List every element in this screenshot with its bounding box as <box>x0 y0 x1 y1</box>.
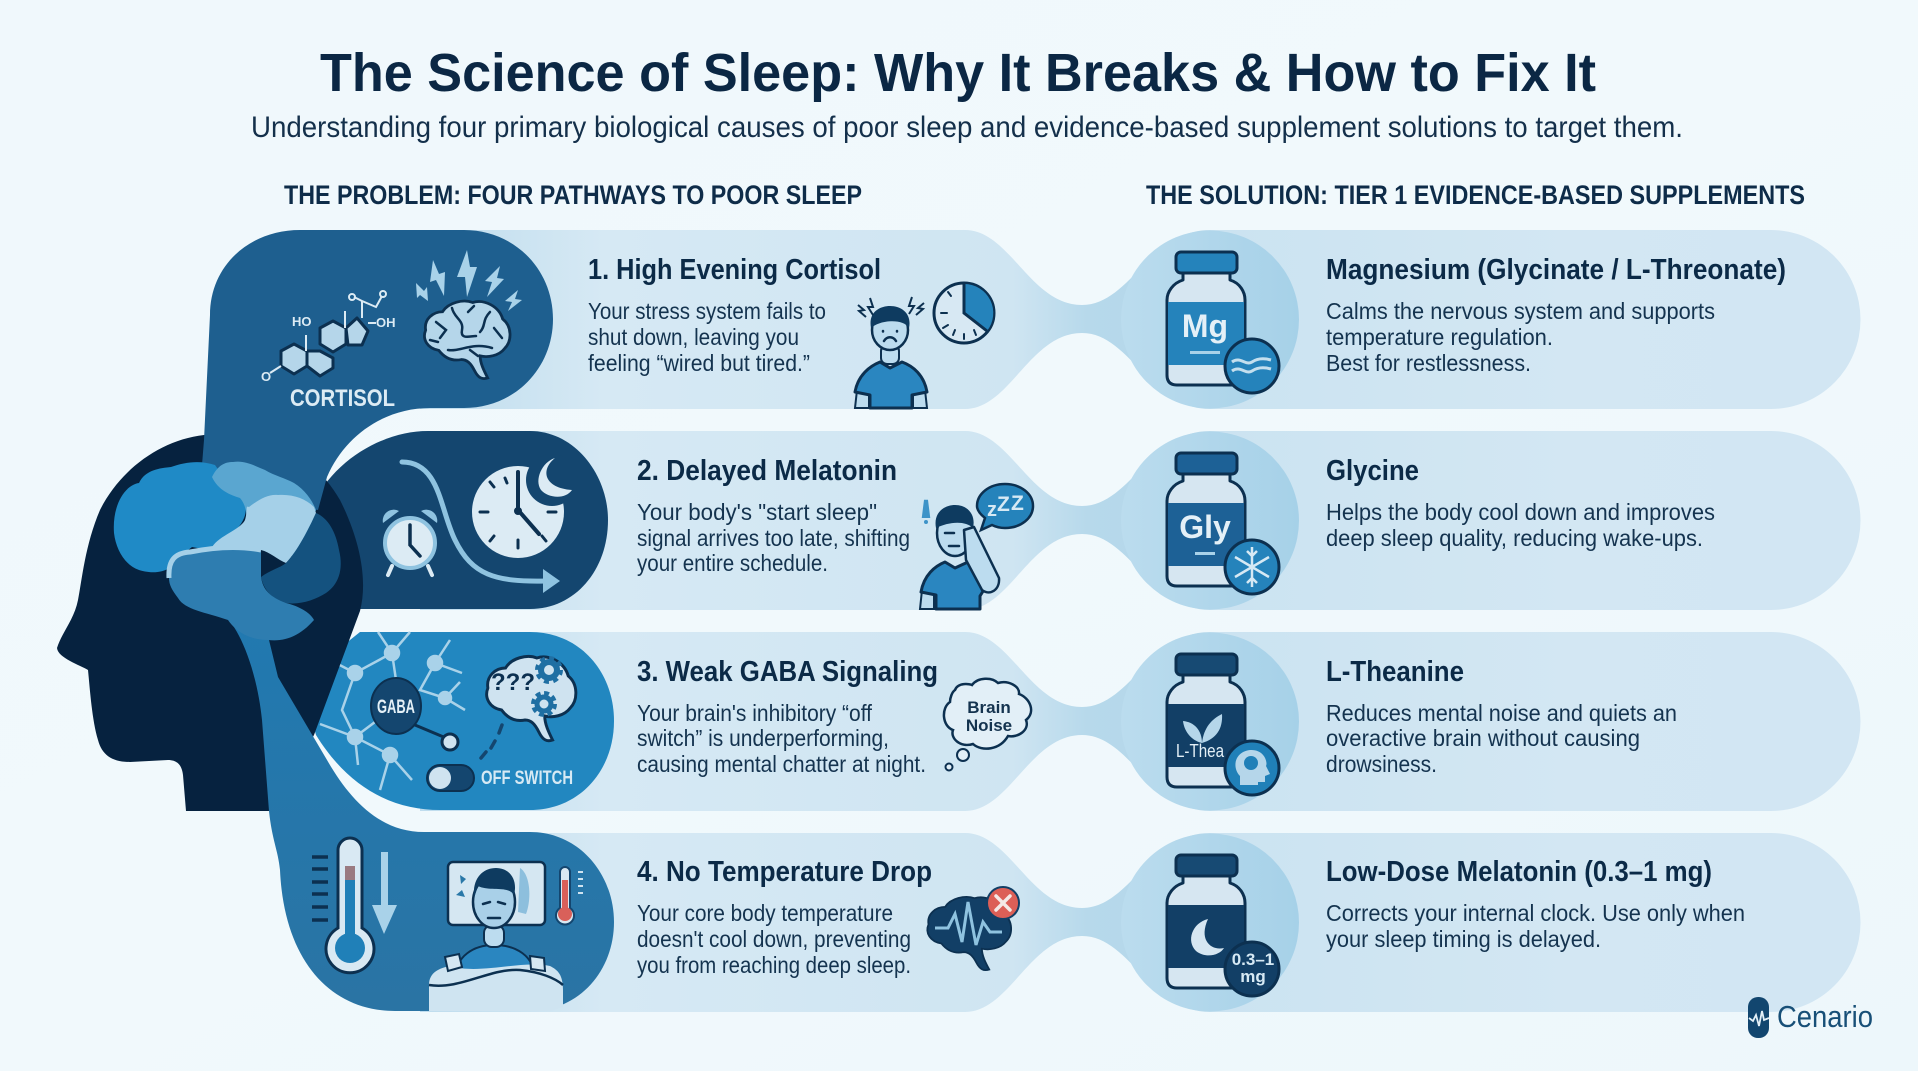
panel: magnesium text: Best for restlessness. <box>1326 350 1531 376</box>
panel: low-dose melatonin text: Corrects your internal clock. Use only when <box>1326 900 1745 926</box>
panel: row 4 text: doesn't cool down, preventing <box>637 926 911 952</box>
icon: sleepy person rubbing eye <box>920 484 1033 609</box>
panel: l-theanine text: Reduces mental noise and quiets an <box>1326 700 1677 726</box>
icon: l-theanine bottle <box>1167 654 1279 795</box>
panel: row 1 text: shut down, leaving you <box>588 324 799 350</box>
light row backgrounds with connecting necks <box>420 230 1860 1012</box>
icon: GABA node <box>371 678 458 750</box>
icon: brain noise thought cloud: Noise <box>966 716 1012 735</box>
panel: row 3 text: causing mental chatter at night. <box>637 751 926 777</box>
panel: row 1 text: Your stress system fails to <box>588 298 826 324</box>
panel: magnesium text <box>1326 254 1786 376</box>
panel: low-dose melatonin text: Low-Dose Melatonin (0.3–1 mg) <box>1326 856 1712 888</box>
panel: row 4 text: Your core body temperature <box>637 900 893 926</box>
icon: sleeping person in bed <box>429 862 563 1011</box>
panel: row 3 text: Your brain's inhibitory “off <box>637 700 872 726</box>
panel: row 2 text <box>637 455 910 576</box>
panel: magnesium text: Calms the nervous system and supports <box>1326 298 1715 324</box>
panel: row 2 text: 2. Delayed Melatonin <box>637 455 897 487</box>
heading: the solution: THE SOLUTION: TIER 1 EVIDENCE-BASED SUPPLEMENTS <box>1146 180 1805 210</box>
panel: row 1 text: feeling “wired but tired.” <box>588 350 810 376</box>
icon: sleep delay curve arrow <box>402 462 560 593</box>
icon: brain noise thought cloud <box>944 679 1031 770</box>
logo: Cenario: Cenario <box>1777 999 1873 1034</box>
icon: sleepy person rubbing eye: z <box>987 499 997 521</box>
panel: glycine text: Glycine <box>1326 455 1419 487</box>
icon: low-dose melatonin bottle: mg <box>1240 967 1266 986</box>
logo: Cenario <box>1748 997 1873 1038</box>
panel: row 2 text: your entire schedule. <box>637 550 828 576</box>
panel: row 3 text <box>637 656 938 777</box>
icon: off switch toggle <box>427 725 573 791</box>
icon: brain with question marks and gears <box>487 656 576 741</box>
icon: thermometer with down arrow <box>312 838 397 973</box>
panel: no temperature drop icons <box>229 620 614 1011</box>
panel: magnesium text: Magnesium (Glycinate / L-Threonate) <box>1326 254 1786 286</box>
panel: l-theanine text <box>1326 656 1677 777</box>
icon: glycine bottle: Gly <box>1179 509 1231 545</box>
panel: low-dose melatonin text: your sleep timing is delayed. <box>1326 926 1601 952</box>
icon: cortisol molecule <box>261 291 396 412</box>
brain blobs <box>114 462 341 640</box>
subtitle: Understanding four primary biological causes of poor sleep and evidence-based supplement solutions to target them. <box>251 111 1683 144</box>
icon: cortisol molecule: HO <box>292 314 312 329</box>
icon: magnesium bottle: Mg <box>1182 308 1228 344</box>
icon: stressed brain with lightning <box>416 250 522 379</box>
panel: row 3 text: switch” is underperforming, <box>637 725 889 751</box>
icon: brain with question marks and gears: ??? <box>491 669 535 696</box>
icon: glycine bottle <box>1167 453 1279 594</box>
head silhouette <box>57 435 363 811</box>
icon: brain noise thought cloud: Brain <box>967 698 1011 717</box>
panel: row 4 text: 4. No Temperature Drop <box>637 856 932 888</box>
icon: sleepy person rubbing eye: Z <box>997 493 1010 516</box>
icon: low-dose melatonin bottle <box>1167 855 1279 996</box>
panel: glycine text: Helps the body cool down and improves <box>1326 499 1715 525</box>
icon: l-theanine bottle: L-Thea <box>1176 741 1225 761</box>
icon: brain with failed signal <box>927 887 1019 970</box>
icon: GABA node: GABA <box>377 697 415 718</box>
panel: row 2 text: signal arrives too late, shifting <box>637 525 910 551</box>
panel: l-theanine text: drowsiness. <box>1326 751 1437 777</box>
icon: wall clock with moon <box>472 454 578 558</box>
panel: l-theanine text: overactive brain without causing <box>1326 725 1640 751</box>
icon: magnesium bottle <box>1167 252 1279 393</box>
icon: neuron network <box>320 632 465 790</box>
icon: alarm clock <box>383 510 437 575</box>
panel: l-theanine text: L-Theanine <box>1326 656 1464 688</box>
panel: high evening cortisol icons <box>200 230 553 510</box>
icon: cortisol molecule: OH <box>376 315 396 330</box>
icon: sleepy person rubbing eye: Z <box>1011 492 1024 515</box>
icon: clock with blue wedge <box>934 283 994 343</box>
icon: cortisol molecule: O <box>261 369 271 384</box>
panel: row 4 text <box>637 856 932 978</box>
heading: the problem: THE PROBLEM: FOUR PATHWAYS TO POOR SLEEP <box>284 180 862 210</box>
panel: row 3 text: 3. Weak GABA Signaling <box>637 656 938 688</box>
panel: magnesium text: temperature regulation. <box>1326 324 1553 350</box>
panel: low-dose melatonin text <box>1326 856 1745 952</box>
panel: delayed melatonin icons <box>300 431 608 609</box>
icon: hot thermometer <box>556 867 583 924</box>
title: The Science of Sleep: Why It Breaks & How to Fix It <box>320 43 1596 103</box>
icon: cortisol molecule: CORTISOL <box>290 385 395 412</box>
panel: row 4 text: you from reaching deep sleep. <box>637 952 911 978</box>
panel: row 2 text: Your body's "start sleep" <box>637 499 877 525</box>
panel: glycine text: deep sleep quality, reducing wake-ups. <box>1326 525 1703 551</box>
panel: row 1 text: 1. High Evening Cortisol <box>588 254 881 286</box>
panel: row 1 text <box>588 254 881 376</box>
icon: tired person with stress bolts <box>855 297 927 408</box>
panel: glycine text <box>1326 455 1715 551</box>
panel: weak GABA icons <box>300 632 614 810</box>
icon: low-dose melatonin bottle: 0.3–1 <box>1232 950 1274 969</box>
icon: off switch toggle: OFF SWITCH <box>481 768 573 789</box>
